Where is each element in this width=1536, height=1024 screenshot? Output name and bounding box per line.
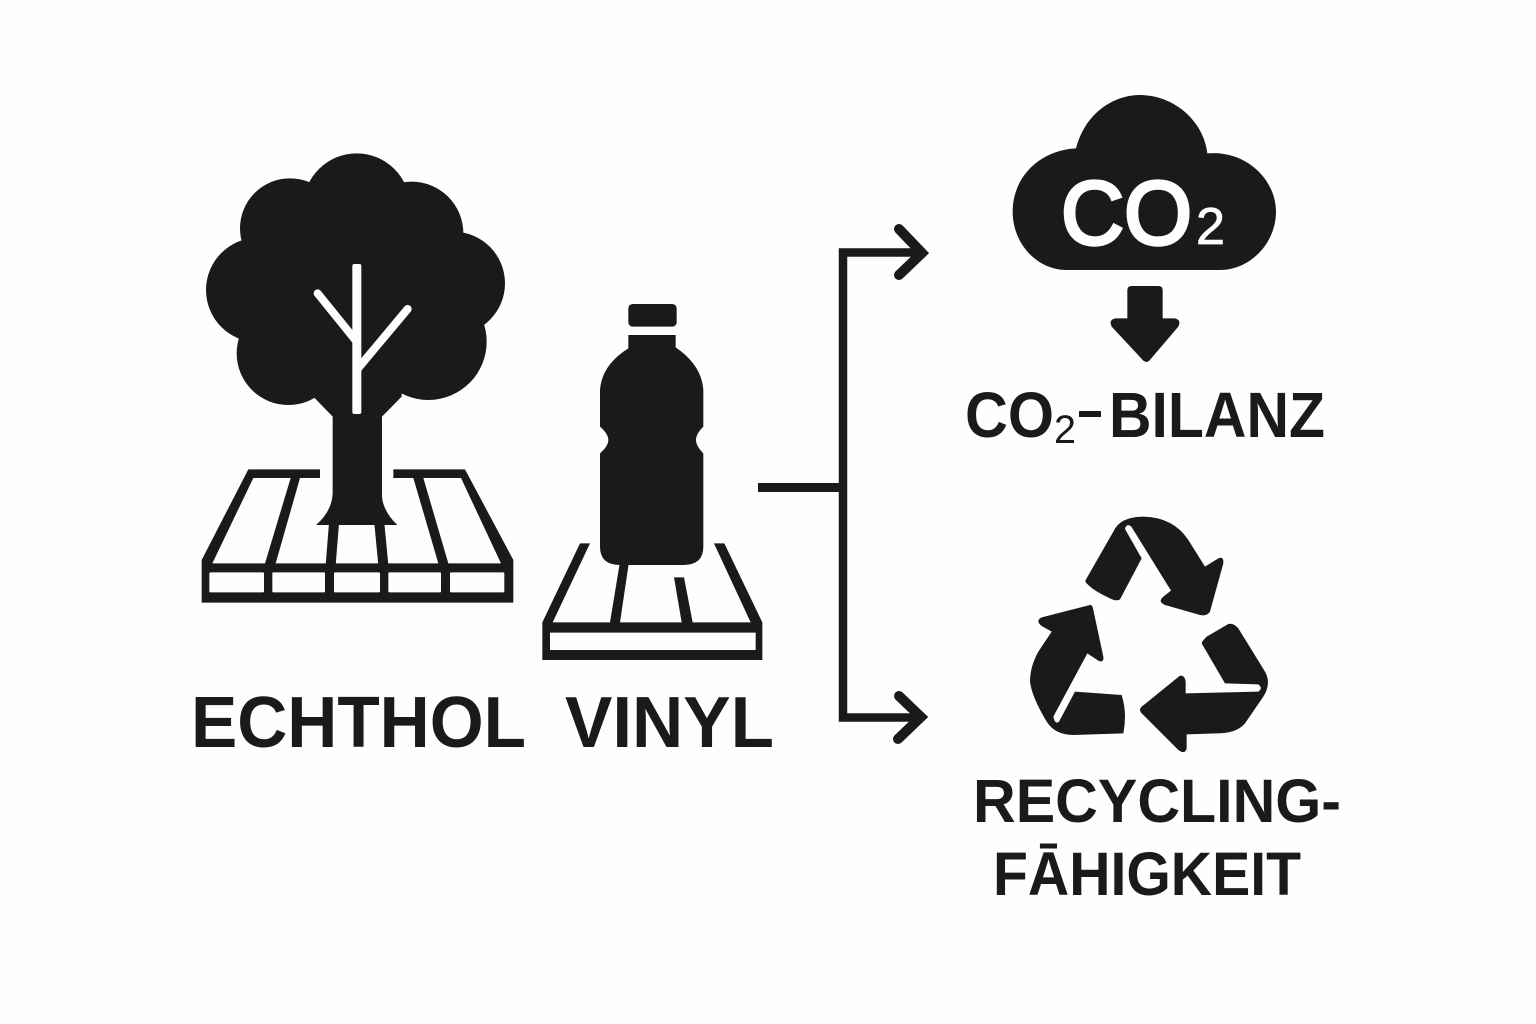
label: Recycling-: RECYCLING- [973, 767, 1341, 835]
label: Fähigkeit: FĀHIGKEIT [993, 840, 1301, 908]
top arrow [1085, 517, 1223, 615]
label: CO2-Bilanz: CO [965, 379, 1054, 451]
icon: CO2 cloud with down arrow [1013, 95, 1276, 362]
label: Echthol: ECHTHOL [191, 683, 526, 763]
icon: recycling symbol [1030, 517, 1268, 752]
down arrow [1111, 286, 1179, 362]
arrow: branching connector [758, 229, 922, 739]
cloud [1013, 95, 1276, 270]
right arrow [1140, 624, 1268, 752]
icon: plastic bottle on vinyl deck [542, 304, 762, 660]
label: CO2-Bilanz: BILANZ [1109, 379, 1325, 451]
icon: tree on wooden deck [202, 153, 513, 603]
cloud text: CO2: CO [1061, 164, 1192, 264]
tree branches [318, 264, 408, 414]
label: Vinyl: VINYL [565, 683, 774, 763]
left arrow [1030, 605, 1125, 735]
wooden deck [202, 467, 513, 603]
vinyl deck [542, 543, 762, 660]
bottle cap [628, 304, 677, 327]
bottle body [600, 335, 703, 565]
label: CO2-Bilanz [965, 379, 1325, 452]
cloud text: CO2: 2 [1196, 198, 1225, 256]
label: CO2-Bilanz: 2 [1054, 408, 1076, 452]
tree silhouette [206, 153, 505, 525]
